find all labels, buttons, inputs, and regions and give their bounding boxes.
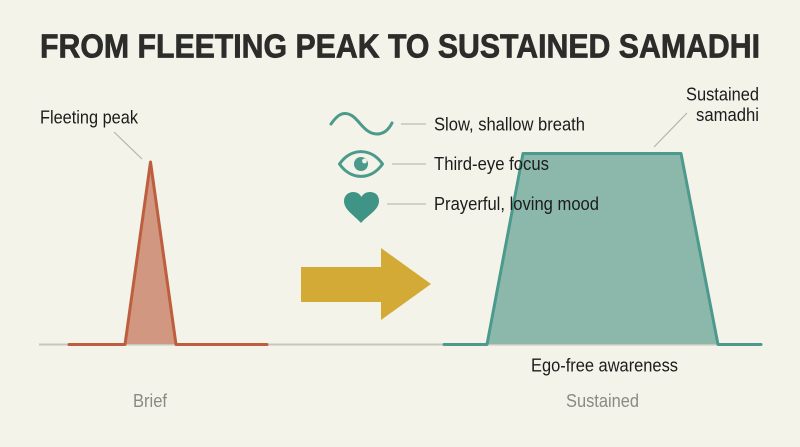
arrow [301,248,431,320]
label: breath: Slow, shallow breath [434,114,585,134]
connector: heart [387,203,426,205]
plateau area [487,154,718,344]
label: sustained samadhi: Sustained [686,84,759,104]
label: sustained samadhi [686,84,759,125]
icon: eye [340,152,382,176]
connector: eye [392,163,426,165]
label: ego-free awareness: Ego-free awareness [531,356,678,376]
icon: breath wave [331,114,392,134]
label: prayerful: Prayerful, loving mood [434,194,599,214]
label: fleeting peak: Fleeting peak [40,108,139,128]
peak area [125,162,176,344]
label: sustained: Sustained [566,391,639,411]
chart: sustained samadhi [444,154,761,344]
leader: sustained samadhi [654,113,687,147]
peak outline [69,162,267,344]
label: third-eye: Third-eye focus [434,154,549,174]
leader: fleeting peak [114,132,142,159]
icon: heart [344,192,379,223]
label: sustained samadhi: samadhi [696,105,759,125]
chart: fleeting peak [69,162,267,344]
label: brief: Brief [133,391,168,411]
connector: breath [401,123,426,125]
plateau outline [444,154,761,344]
